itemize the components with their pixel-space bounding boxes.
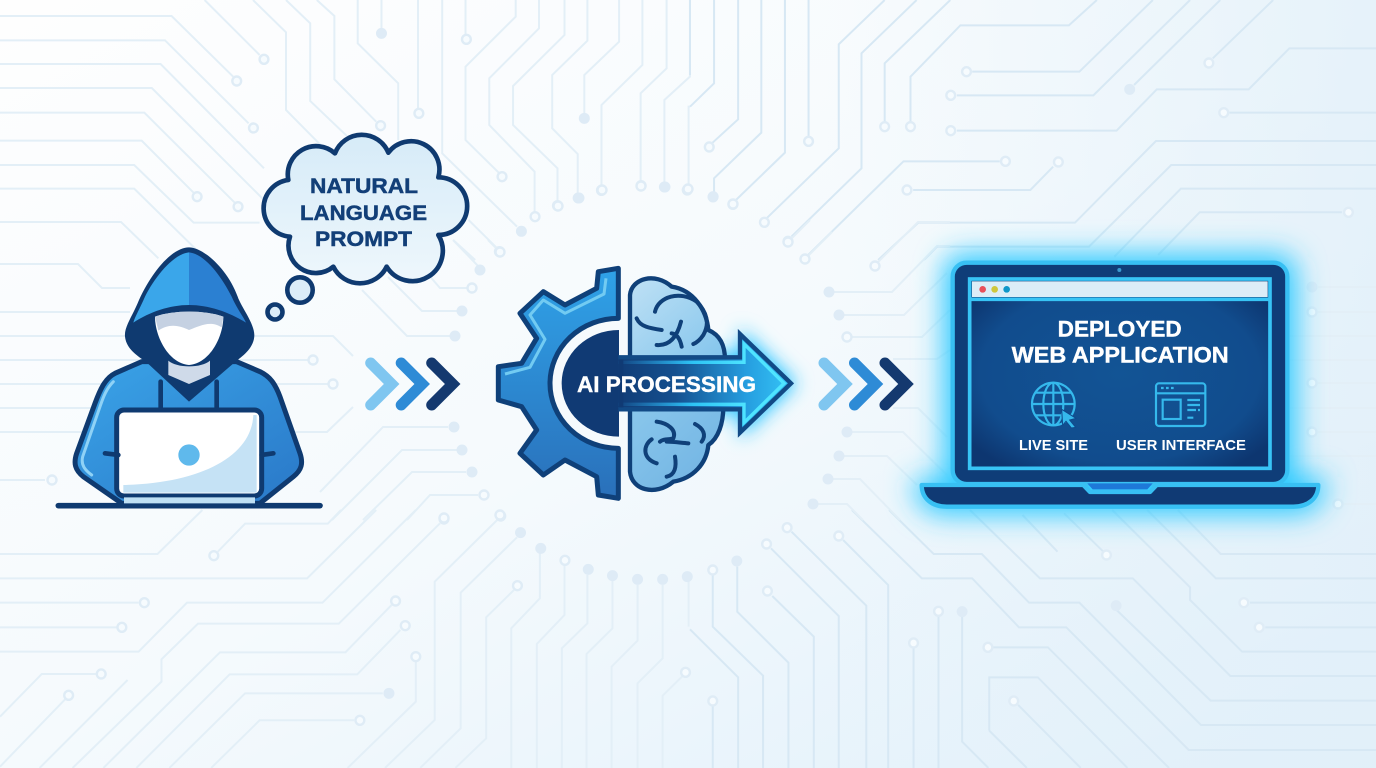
label: live site: LIVE SITE bbox=[1019, 437, 1088, 454]
dark half disc bbox=[562, 330, 619, 437]
icon: globe with cursor bbox=[1032, 383, 1076, 428]
icon: glowing laptop with deployed web application bbox=[913, 253, 1327, 515]
processing arrow bbox=[618, 334, 791, 433]
face bbox=[155, 312, 223, 365]
traces: bottom right bbox=[690, 510, 1376, 768]
cloud label bbox=[300, 174, 427, 251]
label: deployed web application: WEB APPLICATION bbox=[1012, 342, 1229, 368]
label: AI processing: AI PROCESSING bbox=[577, 372, 756, 397]
cloud label: PROMPT bbox=[315, 227, 412, 251]
hoodie body bbox=[75, 362, 302, 503]
brain lower half bbox=[630, 407, 723, 490]
gear highlight bbox=[505, 278, 606, 374]
label: deployed web application bbox=[1012, 316, 1229, 368]
trackpad notch bbox=[1087, 483, 1153, 489]
thought circle large bbox=[287, 277, 313, 303]
hoodie strings bbox=[161, 382, 217, 408]
label: deployed web application: DEPLOYED bbox=[1058, 316, 1182, 342]
hood bbox=[125, 247, 254, 402]
laptop glow bbox=[913, 253, 1327, 515]
thought circle small bbox=[268, 304, 282, 320]
hood right panel bbox=[189, 252, 246, 323]
cloud label: LANGUAGE bbox=[300, 201, 427, 225]
icon: hooded user at laptop bbox=[58, 247, 320, 506]
face shadow bbox=[155, 312, 223, 331]
webcam bbox=[1117, 268, 1121, 272]
traces: top left bbox=[0, 0, 692, 260]
traces: middle band bbox=[0, 182, 1376, 522]
arrow cover bbox=[619, 359, 623, 407]
laptop base bbox=[922, 485, 1318, 507]
cloud label: NATURAL bbox=[310, 174, 418, 198]
table line bbox=[58, 497, 320, 514]
neck bbox=[168, 361, 210, 384]
brain upper half bbox=[630, 278, 725, 360]
screen frame bbox=[970, 279, 1270, 468]
laptop lid bbox=[953, 263, 1287, 484]
arrow: chevrons from user to AI bbox=[371, 363, 453, 405]
body highlight bbox=[82, 382, 113, 475]
cloud shape bbox=[264, 135, 467, 283]
user laptop bbox=[105, 410, 273, 503]
icon: user interface window bbox=[1156, 383, 1205, 426]
arrow glow bbox=[687, 328, 797, 438]
browser bar bbox=[970, 281, 1270, 299]
thought bubble: natural language prompt bbox=[264, 135, 467, 320]
traces: top right bbox=[690, 0, 1376, 260]
gear half bbox=[498, 268, 618, 498]
label: user interface: USER INTERFACE bbox=[1116, 437, 1246, 454]
hood left panel bbox=[133, 252, 189, 323]
traces: bottom left bbox=[0, 510, 693, 768]
icon: AI processing gear, brain and arrow bbox=[498, 268, 797, 498]
arrow inner edge bbox=[618, 344, 784, 423]
arrow: chevrons from AI to web app bbox=[824, 363, 906, 405]
